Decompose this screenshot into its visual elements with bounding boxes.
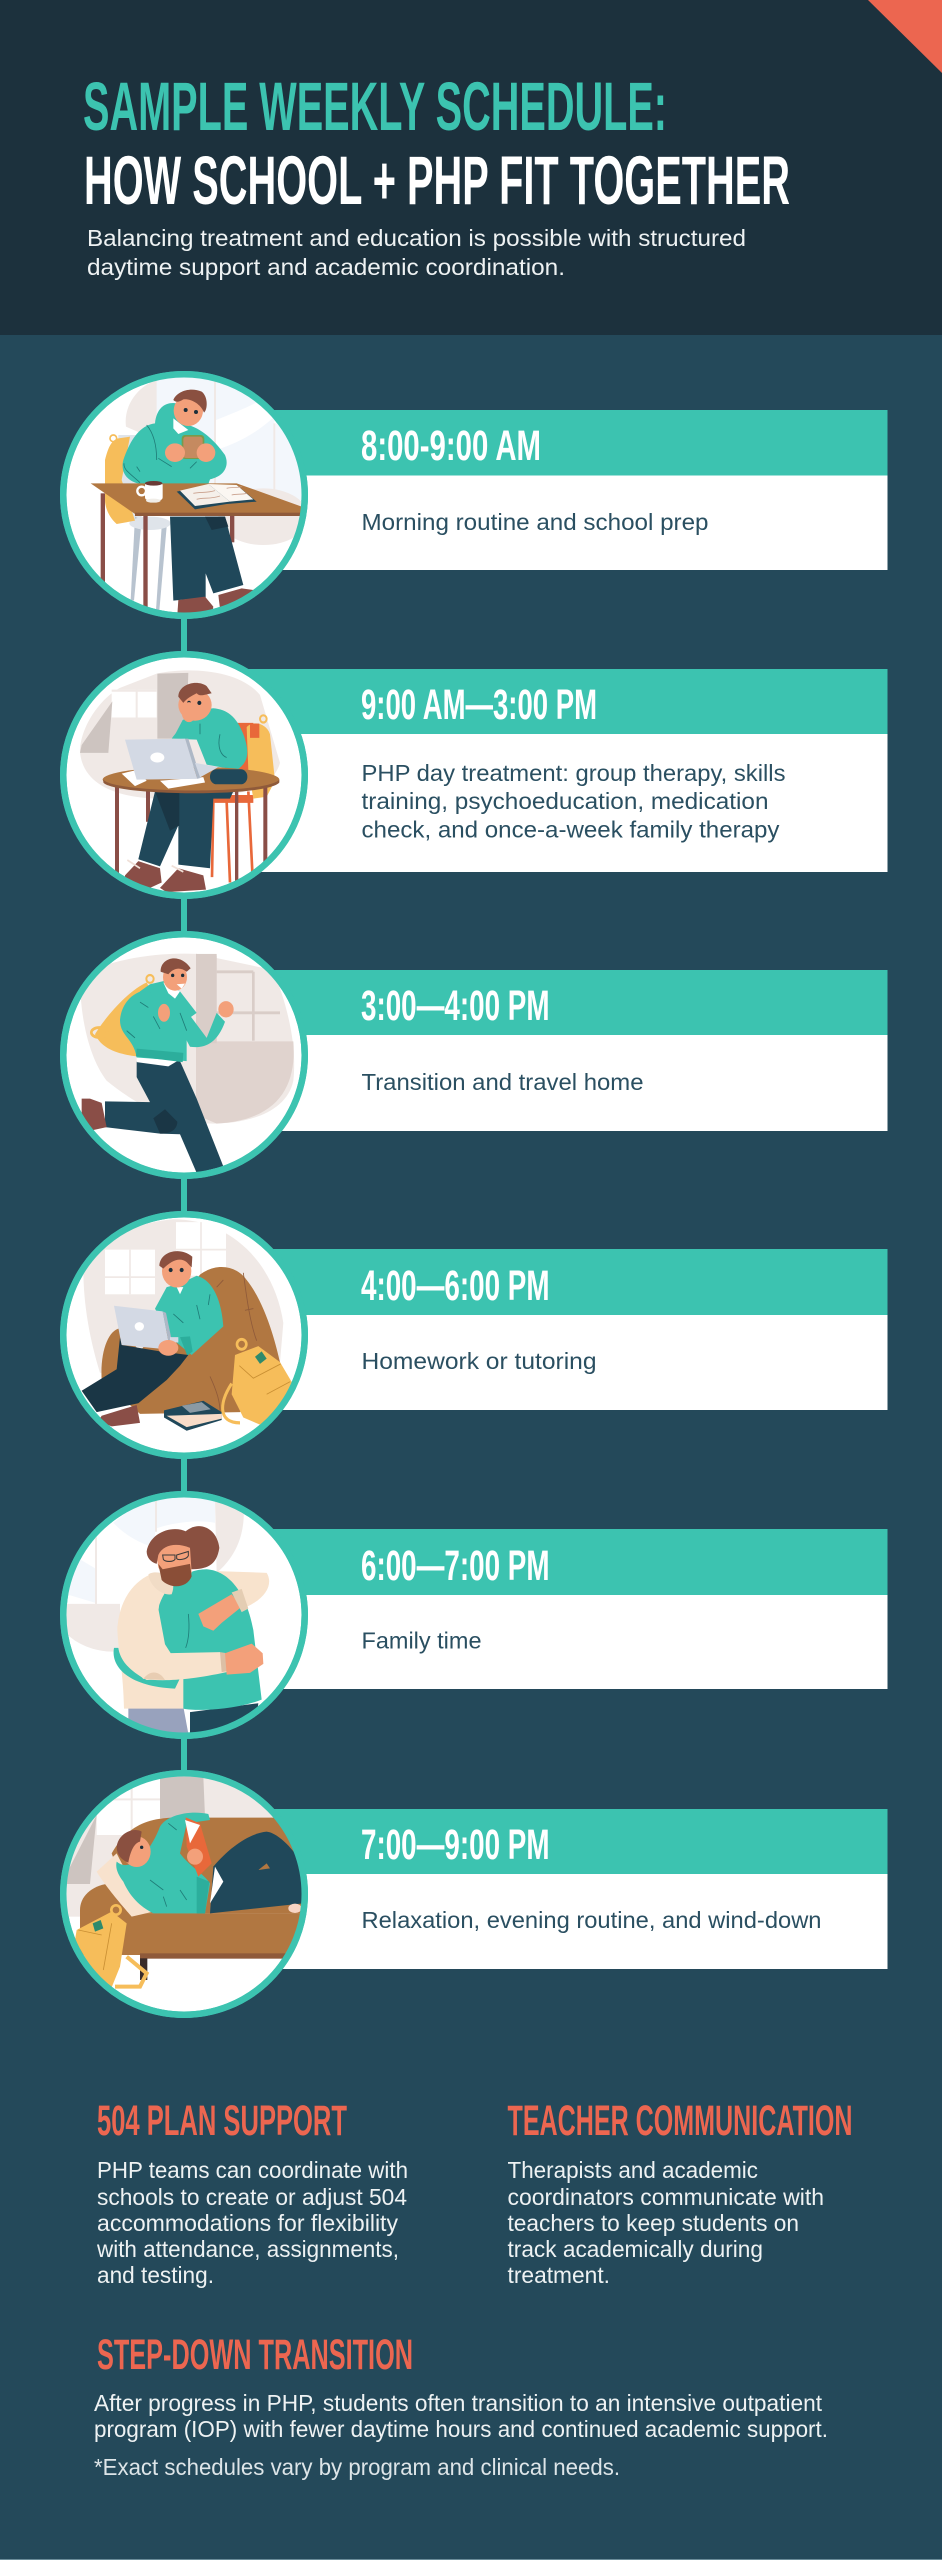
time bar: [184, 1249, 888, 1315]
time label: 8:00-9:00 AM: [361, 423, 541, 470]
body: program (IOP) with fewer daytime hours and continued academic support.: [94, 2416, 828, 2442]
row: 7:00-9:00 PM: [63, 1773, 888, 2015]
time bar: [184, 1809, 888, 1874]
row: 6:00-7:00 PM: [63, 1494, 888, 1742]
body: teachers to keep students on: [508, 2210, 799, 2236]
description panel: [184, 1035, 888, 1131]
body: Therapists and academic: [508, 2157, 758, 2183]
footnote: *Exact schedules vary by program and clinical needs.: [94, 2454, 620, 2480]
body: [96, 2157, 408, 2288]
body: treatment.: [508, 2262, 610, 2288]
subtitle: Balancing treatment and education is possible with structured: [87, 225, 746, 251]
time bar: [184, 410, 888, 476]
description: Family time: [362, 1628, 482, 1654]
row: 3:00-4:00 PM: [63, 934, 888, 1176]
illustration circle: student reading on couch: [63, 1773, 305, 2015]
description: training, psychoeducation, medication: [362, 788, 768, 814]
description: Relaxation, evening routine, and wind-down: [362, 1907, 822, 1933]
body: [94, 2390, 828, 2442]
time label: 3:00—4:00 PM: [361, 983, 550, 1030]
time bar: [184, 1529, 888, 1595]
description panel: [184, 1595, 888, 1689]
time label: 7:00—9:00 PM: [361, 1822, 550, 1869]
time label: 4:00—6:00 PM: [361, 1263, 550, 1310]
row: 4:00-6:00 PM: [63, 1214, 888, 1456]
row: 9:00 AM-3:00 PM: [63, 654, 888, 896]
body: accommodations for flexibility: [97, 2210, 398, 2236]
body: coordinators communicate with: [508, 2184, 824, 2210]
description panel: [184, 734, 888, 872]
body: and testing.: [97, 2262, 214, 2288]
heading: 504 PLAN SUPPORT: [97, 2098, 347, 2145]
note: teacher communication: [508, 2098, 852, 2288]
description: [362, 760, 786, 842]
description: Morning routine and school prep: [362, 509, 708, 535]
description: PHP day treatment: group therapy, skills: [362, 760, 786, 786]
body: PHP teams can coordinate with: [97, 2157, 408, 2183]
body: schools to create or adjust 504: [97, 2184, 407, 2210]
heading: STEP-DOWN TRANSITION: [97, 2332, 413, 2379]
note: step-down transition: [94, 2332, 828, 2480]
row: 8:00-9:00 AM: [63, 374, 888, 616]
time label: 9:00 AM—3:00 PM: [361, 682, 597, 729]
body: with attendance, assignments,: [96, 2236, 399, 2262]
body: [508, 2157, 824, 2288]
body: After progress in PHP, students often transition to an intensive outpatient: [94, 2390, 823, 2416]
subtitle: [87, 225, 746, 280]
description: check, and once-a-week family therapy: [362, 816, 780, 842]
illustration circle: student running with backpack: [63, 934, 305, 1176]
subtitle: daytime support and academic coordination.: [87, 254, 565, 280]
description: Homework or tutoring: [362, 1348, 596, 1374]
header band: [0, 0, 942, 335]
description panel: [184, 1315, 888, 1410]
timeline connectors: [181, 615, 187, 1775]
illustration circle: student at desk with sandwich: [63, 374, 308, 616]
time label: 6:00—7:00 PM: [361, 1543, 550, 1590]
corner triangle: [868, 0, 942, 73]
description: Transition and travel home: [362, 1069, 644, 1095]
illustration circle: student on beanbag: [63, 1214, 305, 1456]
description panel: [184, 476, 888, 570]
description panel: [184, 1874, 888, 1969]
body: track academically during: [508, 2236, 763, 2262]
time bar: [184, 669, 888, 734]
illustration circle: father and son hugging: [63, 1494, 305, 1742]
time bar: [184, 970, 888, 1035]
illustration circle: student at laptop: [63, 654, 305, 896]
note: 504 plan support: [96, 2098, 408, 2288]
